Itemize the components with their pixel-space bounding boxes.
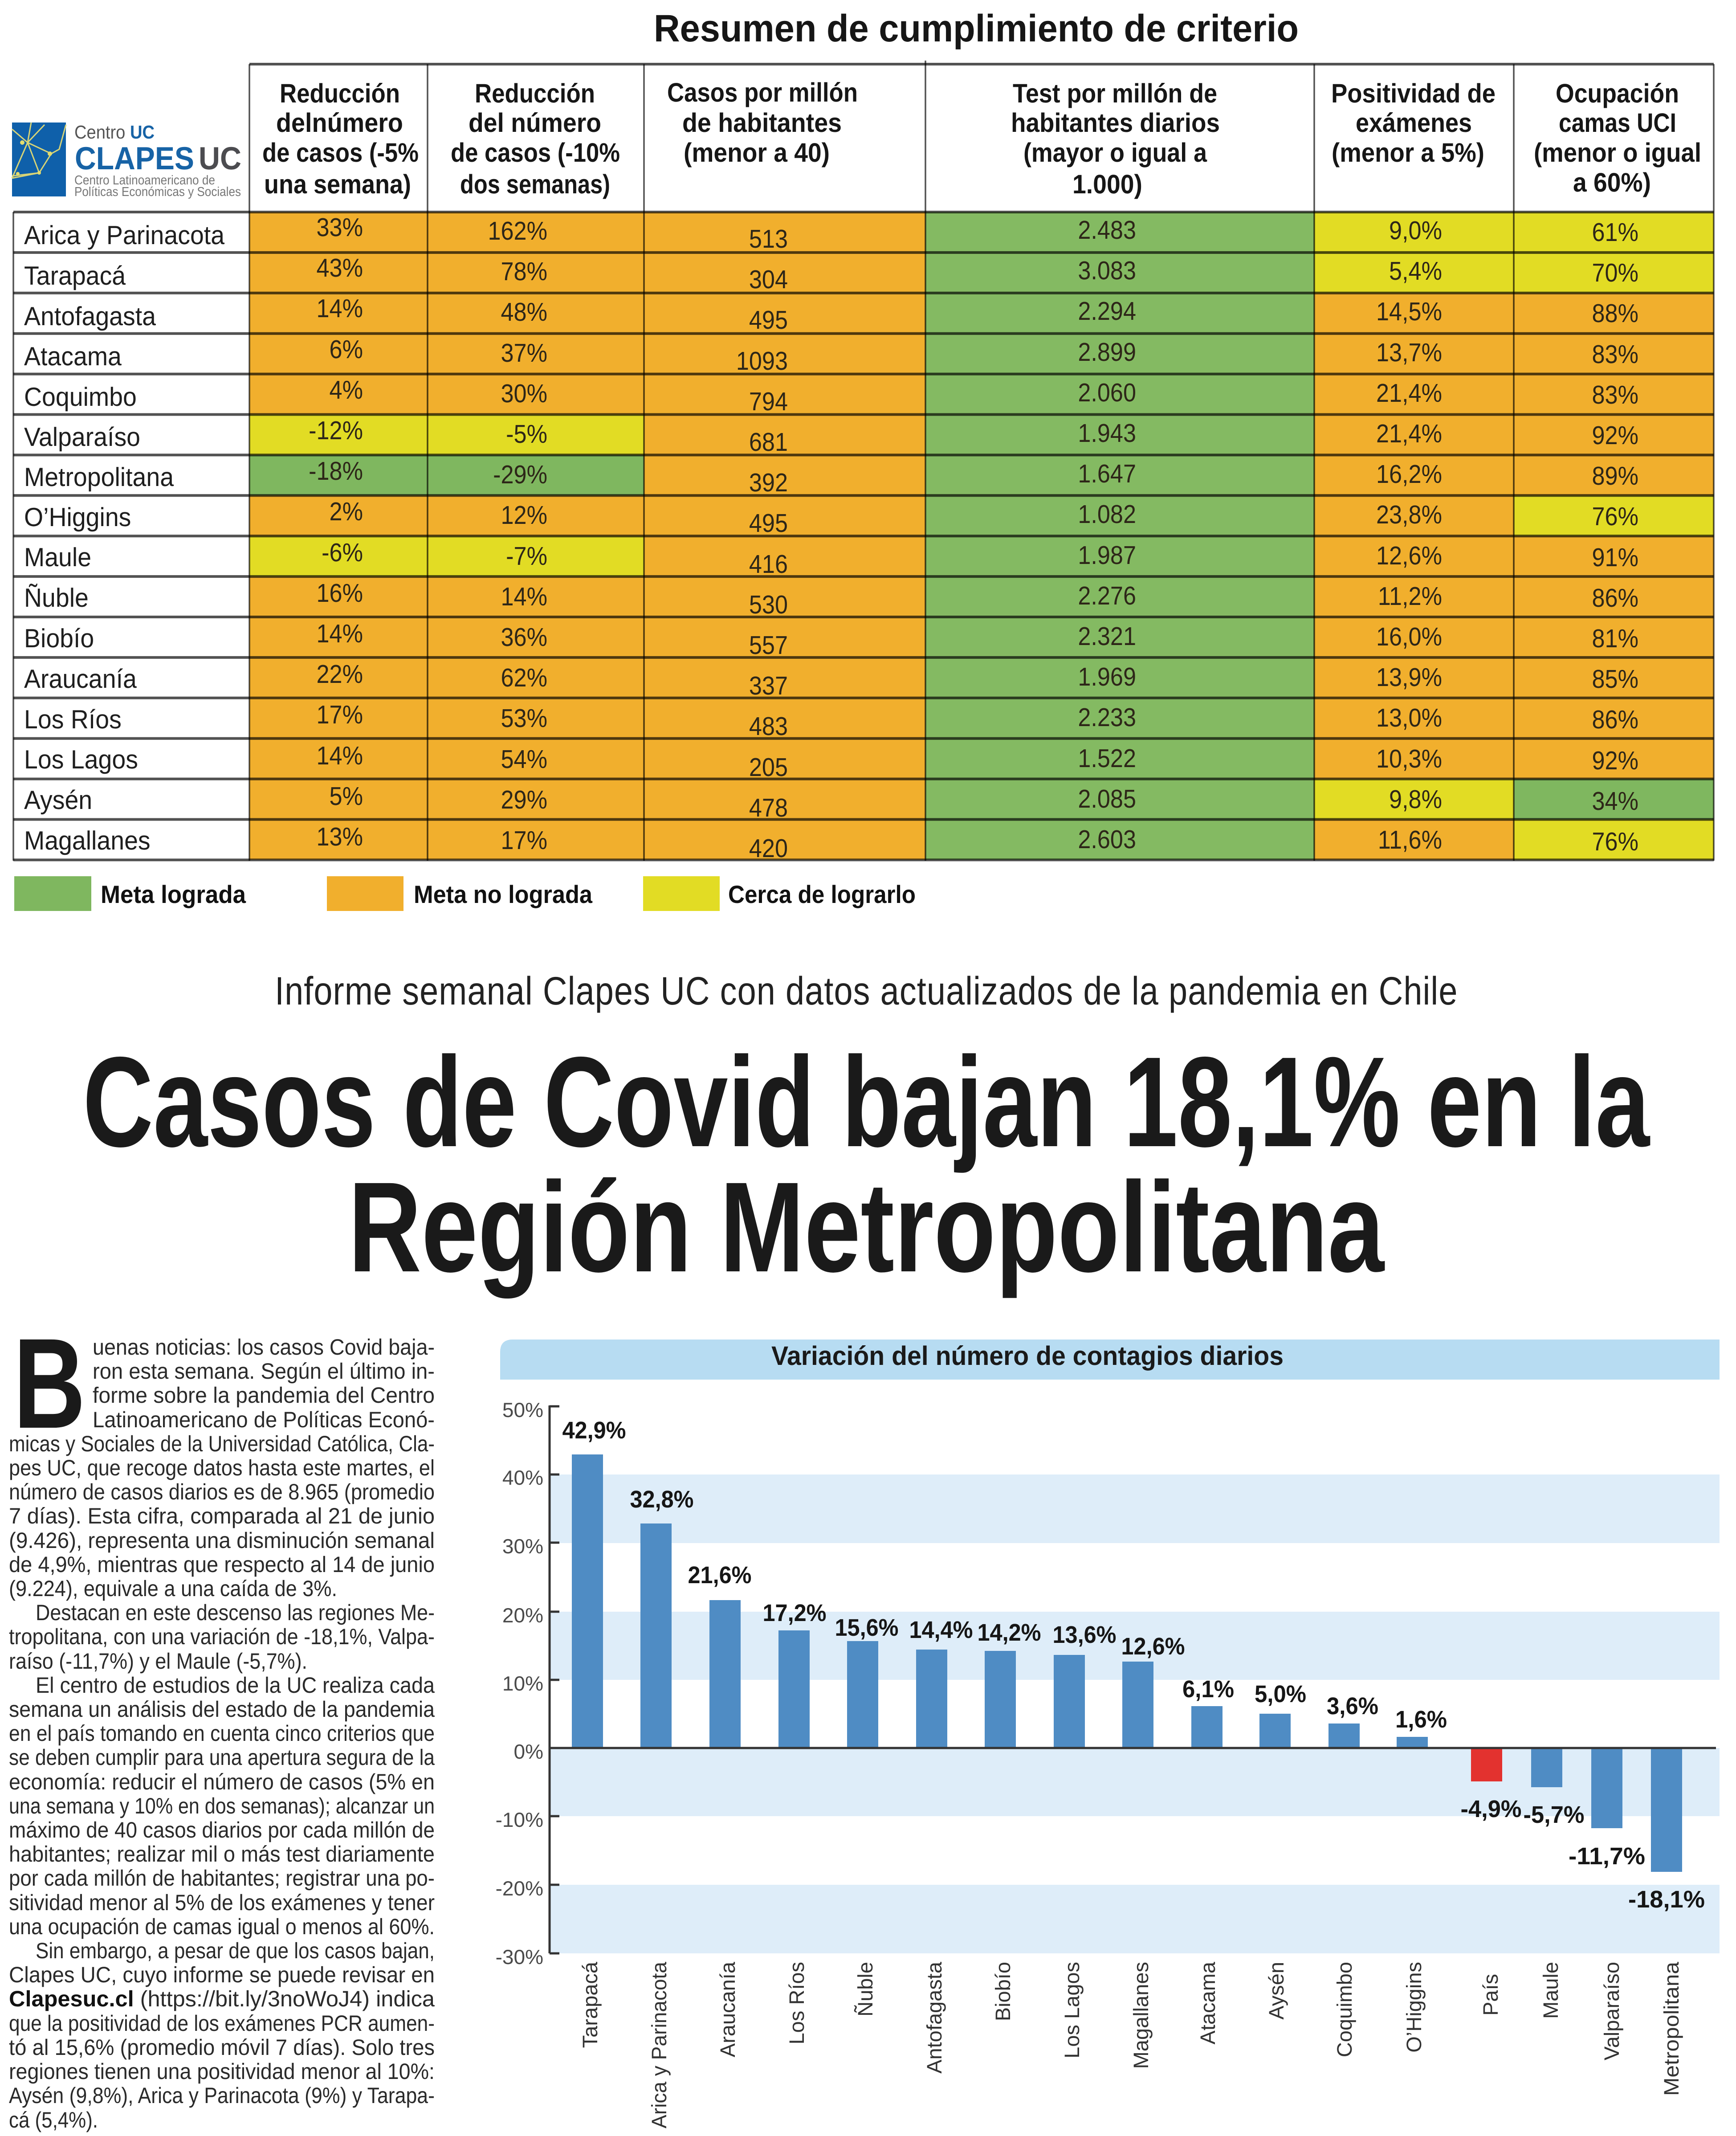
column: reducción dos semanas: 30%: [501, 379, 547, 408]
column: test por millón: 1.082: [1078, 500, 1136, 529]
column: reducción una semana: 22%: [317, 660, 363, 689]
column headers: (mayor o igual a: [1023, 138, 1207, 167]
article body text: [9, 1312, 435, 2132]
column: ocupación UCI: 88%: [1592, 299, 1638, 328]
column headers: a 60%): [1573, 167, 1651, 197]
article paragraphs: raíso (-11,7%) y el Maule (-5,7%).: [9, 1649, 307, 1674]
column headers: Ocupación: [1556, 78, 1679, 108]
column: reducción dos semanas: -7%: [506, 542, 547, 571]
legend: meta no lograda: [327, 876, 593, 911]
y axis labels: -10%: [496, 1808, 543, 1831]
region names: Antofagasta: [24, 302, 156, 331]
article paragraphs: Destacan en este descenso las regiones Me-: [36, 1600, 435, 1625]
column headers: Positividad de: [1331, 78, 1496, 108]
column headers: de habitantes: [682, 108, 842, 138]
bar value labels: 1,6%: [1395, 1706, 1447, 1733]
category labels: Metropolitana: [1659, 1961, 1683, 2096]
logo wordmark: CLAPES: [75, 141, 194, 176]
column headers: habitantes diarios: [1011, 108, 1220, 138]
column: casos por millón: 420: [749, 834, 788, 863]
column headers: Casos por millón: [667, 78, 858, 107]
article paragraphs: (9.224), equivale a una caída de 3%.: [9, 1576, 337, 1601]
category labels: Atacama: [1196, 1961, 1219, 2044]
column: ocupación UCI: 76%: [1592, 502, 1638, 531]
chart title band: Variación del número de contagios diarios: [771, 1341, 1284, 1371]
y axis labels: 40%: [502, 1466, 543, 1489]
article paragraphs: [9, 1335, 435, 2132]
column: reducción una semana: 6%: [330, 335, 363, 364]
column: ocupación UCI: 86%: [1592, 584, 1638, 613]
article paragraphs: de 4,9%, mientras que respecto al 14 de junio: [9, 1552, 435, 1577]
article paragraphs: tropolitana, con una variación de -18,1%, Valpa-: [9, 1624, 435, 1649]
region names: Ñuble: [24, 583, 89, 613]
column: reducción dos semanas: 53%: [501, 704, 547, 733]
y axis labels: [496, 1398, 543, 1969]
column: positividad: 5,4%: [1389, 257, 1442, 286]
bar value labels: 3,6%: [1327, 1693, 1378, 1719]
category labels: Aysén: [1264, 1962, 1288, 2020]
article paragraphs: forme sobre la pandemia del Centro: [93, 1383, 435, 1408]
article paragraphs: Clapesuc.cl (https://bit.ly/3noWoJ4) indica: [9, 1986, 435, 2011]
category labels: Los Ríos: [785, 1962, 808, 2044]
column: positividad: 23,8%: [1376, 500, 1442, 529]
category labels: Valparaíso: [1600, 1962, 1623, 2060]
article paragraphs: sitividad menor al 5% de los exámenes y tener: [9, 1890, 435, 1915]
category labels: Coquimbo: [1333, 1962, 1356, 2057]
bar value labels: 15,6%: [835, 1614, 899, 1641]
bar value labels: 14,4%: [909, 1617, 973, 1643]
column headers: delnúmero: [276, 108, 403, 138]
headline: [83, 1030, 1650, 1299]
article paragraphs: 7 días). Esta cifra, comparada al 21 de junio: [9, 1503, 435, 1528]
article paragraphs: que la positividad de los exámenes PCR aumen-: [9, 2011, 435, 2036]
icon: blue network square: [12, 123, 66, 196]
column: positividad: 16,0%: [1376, 622, 1442, 651]
bar value labels: 17,2%: [762, 1600, 827, 1626]
column: ocupación UCI: 83%: [1592, 380, 1638, 409]
column: casos por millón: [736, 225, 788, 863]
legend: meta no lograda: Meta no lograda: [414, 880, 593, 908]
column: positividad: 13,0%: [1376, 703, 1442, 732]
column: reducción dos semanas: 48%: [501, 298, 547, 327]
article paragraphs: micas y Sociales de la Universidad Católica, Cla-: [9, 1431, 435, 1456]
y axis labels: 10%: [502, 1672, 543, 1695]
bars: [572, 1454, 1682, 1872]
article paragraphs: una ocupación de camas igual o menos al 60%.: [9, 1914, 435, 1939]
category labels: Arica y Parinacota: [647, 1961, 671, 2128]
category labels: Araucanía: [716, 1961, 739, 2057]
headline: Región Metropolitana: [348, 1156, 1385, 1299]
column: test por millón: 2.060: [1078, 378, 1136, 407]
region names: Araucanía: [24, 664, 137, 694]
column: ocupación UCI: 76%: [1592, 827, 1638, 856]
region names: Los Ríos: [24, 705, 122, 734]
column: reducción dos semanas: [488, 216, 547, 855]
column: reducción una semana: 14%: [317, 741, 363, 770]
article paragraphs: Latinoamericano de Políticas Econó-: [93, 1407, 435, 1432]
column: casos por millón: 205: [749, 753, 788, 782]
region names: Magallanes: [24, 826, 151, 855]
logo wordmark: Políticas Económicas y Sociales: [74, 185, 241, 199]
region names: Valparaíso: [24, 422, 140, 452]
region names: Metropolitana: [24, 462, 174, 492]
column: positividad: [1376, 216, 1442, 854]
article paragraphs: economía: reducir el número de casos (5% en: [9, 1769, 435, 1794]
category labels: [578, 1961, 1683, 2128]
category labels: Tarapacá: [578, 1961, 602, 2048]
column: casos por millón: 513: [749, 225, 788, 253]
column: reducción una semana: 33%: [317, 213, 363, 242]
y axis labels: 30%: [502, 1535, 543, 1558]
column: test por millón: 1.987: [1078, 541, 1136, 570]
category labels: Los Lagos: [1060, 1962, 1084, 2058]
legend: meta lograda: Meta lograda: [101, 880, 246, 908]
column headers: (menor a 40): [684, 138, 830, 167]
column headers: del número: [469, 108, 601, 138]
table cell colours: [249, 212, 1714, 860]
column: test por millón: 3.083: [1078, 256, 1136, 285]
column: casos por millón: 392: [749, 468, 788, 497]
column: casos por millón: 304: [749, 265, 788, 294]
column headers: Reducción: [280, 78, 400, 108]
column headers: exámenes: [1356, 108, 1472, 138]
article paragraphs: ron esta semana. Según el último in-: [93, 1359, 435, 1384]
column: casos por millón: 530: [749, 590, 788, 619]
column: positividad: 21,4%: [1376, 419, 1442, 448]
article paragraphs: Clapes UC, cuyo informe se puede revisar en: [9, 1962, 435, 1987]
column: reducción una semana: -12%: [309, 416, 363, 445]
column headers: Reducción: [475, 78, 595, 108]
column headers: camas UCI: [1559, 108, 1676, 138]
bar value labels: 14,2%: [977, 1619, 1041, 1646]
y axis labels: 0%: [514, 1740, 543, 1763]
region names: O’Higgins: [24, 502, 131, 532]
column: reducción dos semanas: -29%: [493, 460, 547, 489]
chart panel: variación del número de contagios diarios: [496, 1340, 1720, 2128]
column: positividad: 12,6%: [1376, 541, 1442, 570]
y axis labels: 20%: [502, 1604, 543, 1627]
column: test por millón: 1.969: [1078, 662, 1136, 691]
column: reducción una semana: 2%: [330, 497, 363, 526]
column: ocupación UCI: 92%: [1592, 746, 1638, 775]
article paragraphs: tó al 15,6% (promedio móvil 7 días). Solo tres: [9, 2035, 435, 2060]
region names: Atacama: [24, 342, 122, 371]
article paragraphs: regiones tienen una positividad menor al 10%:: [9, 2059, 435, 2084]
column: reducción dos semanas: 78%: [501, 257, 547, 286]
column: reducción una semana: 16%: [317, 579, 363, 608]
article paragraphs: habitantes; realizar mil o más test diariamente: [9, 1842, 435, 1866]
column: reducción dos semanas: 162%: [488, 216, 547, 245]
article paragraphs: semana un análisis del estado de la pandemia: [9, 1697, 435, 1722]
column: test por millón: 2.899: [1078, 338, 1136, 367]
article paragraphs: (9.426), representa una disminución semanal: [9, 1528, 435, 1553]
column: casos por millón: 416: [749, 550, 788, 579]
article paragraphs: cá (5,4%).: [9, 2107, 98, 2132]
column: test por millón: 1.647: [1078, 459, 1136, 488]
table: cumplimiento de criterio: [13, 61, 1714, 863]
column: test por millón: 2.294: [1078, 297, 1136, 326]
article paragraphs: se deben cumplir para una apertura segura de la: [9, 1745, 435, 1770]
y axis labels: 50%: [502, 1398, 543, 1421]
column: ocupación UCI: 91%: [1592, 543, 1638, 572]
bar value labels: 42,9%: [562, 1417, 626, 1444]
column: positividad: 9,0%: [1389, 216, 1442, 245]
column: casos por millón: 681: [749, 428, 788, 457]
article paragraphs: El centro de estudios de la UC realiza cada: [36, 1673, 435, 1698]
column: reducción una semana: 4%: [330, 376, 363, 404]
column: reducción dos semanas: 54%: [501, 745, 547, 774]
column: test por millón: 2.603: [1078, 825, 1136, 854]
column headers: de casos (-5%: [262, 138, 419, 167]
drop cap B: B: [13, 1312, 86, 1455]
column: test por millón: 1.522: [1078, 744, 1136, 773]
column: test por millón: 2.321: [1078, 622, 1136, 651]
column: reducción dos semanas: 29%: [501, 785, 547, 814]
category labels: Maule: [1539, 1962, 1562, 2019]
column: reducción dos semanas: 37%: [501, 339, 547, 368]
column: ocupación UCI: 85%: [1592, 665, 1638, 694]
bar value labels: [562, 1417, 1705, 1913]
bar value labels: -4,9%: [1461, 1796, 1521, 1822]
column: reducción una semana: [309, 213, 363, 851]
column: casos por millón: 495: [749, 509, 788, 538]
article paragraphs: número de casos diarios es de 8.965 (promedio: [9, 1479, 435, 1504]
column: positividad: 13,9%: [1376, 663, 1442, 692]
bar value labels: 13,6%: [1053, 1621, 1116, 1648]
column: reducción una semana: 17%: [317, 700, 363, 729]
chart title band: [500, 1340, 1720, 1380]
column: ocupación UCI: 83%: [1592, 340, 1638, 369]
column: reducción una semana: 14%: [317, 619, 363, 648]
y axis labels: -20%: [496, 1877, 543, 1900]
column: reducción una semana: 5%: [330, 782, 363, 811]
column: positividad: 16,2%: [1376, 460, 1442, 489]
column: positividad: 9,8%: [1389, 785, 1442, 814]
article paragraphs: una semana y 10% en dos semanas); alcanzar un: [9, 1793, 435, 1818]
column: casos por millón: 794: [749, 387, 788, 416]
column: reducción una semana: -18%: [309, 457, 363, 486]
category labels: Antofagasta: [922, 1961, 946, 2074]
bar value labels: 12,6%: [1121, 1633, 1185, 1660]
logo: Clapes UC: [12, 122, 241, 199]
legend: cerca de lograrlo: Cerca de lograrlo: [728, 880, 916, 908]
column: reducción una semana: 43%: [317, 253, 363, 282]
category labels: País: [1479, 1974, 1502, 2016]
subtitle: Informe semanal Clapes UC con datos actualizados de la pandemia en Chile: [275, 968, 1457, 1013]
column: test por millón: 2.483: [1078, 216, 1136, 245]
column: casos por millón: 478: [749, 793, 788, 822]
article paragraphs: Sin embargo, a pesar de que los casos bajan,: [36, 1938, 435, 1963]
bar value labels: 6,1%: [1182, 1676, 1234, 1703]
column: test por millón: 2.085: [1078, 784, 1136, 813]
column: ocupación UCI: 81%: [1592, 624, 1638, 653]
region names: Coquimbo: [24, 382, 137, 412]
column headers: de casos (-10%: [451, 138, 620, 167]
column: ocupación UCI: 89%: [1592, 462, 1638, 490]
column: test por millón: 1.943: [1078, 419, 1136, 448]
bar: País: [1471, 1748, 1502, 1781]
article paragraphs: por cada millón de habitantes; registrar una po-: [9, 1866, 435, 1891]
column: casos por millón: 495: [749, 306, 788, 335]
column: ocupación UCI: 70%: [1592, 258, 1638, 287]
logo wordmark: UC: [199, 141, 241, 176]
region names: Tarapacá: [24, 261, 126, 290]
column: casos por millón: 557: [749, 631, 788, 660]
region names: Arica y Parinacota: [24, 221, 224, 250]
region names: Los Lagos: [24, 745, 138, 774]
category labels: O’Higgins: [1402, 1962, 1426, 2053]
bar value labels: -18,1%: [1628, 1886, 1705, 1913]
article paragraphs: uenas noticias: los casos Covid baja-: [93, 1335, 435, 1360]
column: reducción dos semanas: 14%: [501, 582, 547, 611]
y axis labels: -30%: [496, 1945, 543, 1969]
column: reducción dos semanas: 36%: [501, 623, 547, 652]
column headers: (menor a 5%): [1332, 138, 1484, 167]
category labels: Magallanes: [1129, 1962, 1153, 2069]
article paragraphs: Aysén (9,8%), Arica y Parinacota (9%) y Tarapa-: [9, 2083, 435, 2108]
logo wordmark: [74, 122, 241, 199]
article paragraphs: máximo de 40 casos diarios por cada millón de: [9, 1817, 435, 1842]
column headers: una semana): [264, 169, 411, 199]
bar value labels: -11,7%: [1569, 1843, 1645, 1870]
column headers: dos semanas): [460, 169, 610, 199]
column: casos por millón: 483: [749, 712, 788, 741]
axes: [550, 1405, 1716, 1953]
column: reducción una semana: 14%: [317, 294, 363, 323]
category labels: Ñuble: [853, 1962, 877, 2017]
column: reducción una semana: -6%: [322, 538, 363, 567]
logo wordmark: Centro Latinoamericano de: [74, 173, 215, 188]
region names: Maule: [24, 543, 91, 572]
column: positividad: 13,7%: [1376, 338, 1442, 367]
yellow and green exceptions: [249, 212, 1714, 860]
column headers: [262, 78, 1701, 199]
column headers: (menor o igual: [1534, 138, 1701, 167]
column: reducción una semana: 13%: [317, 822, 363, 851]
bar value labels: -5,7%: [1523, 1801, 1585, 1828]
region names: [24, 221, 224, 855]
column: ocupación UCI: [1592, 218, 1638, 856]
column: reducción dos semanas: -5%: [506, 420, 547, 449]
column: positividad: 11,2%: [1378, 582, 1442, 611]
column: reducción dos semanas: 17%: [501, 826, 547, 855]
column: test por millón: [1078, 216, 1136, 854]
logo wordmark: Centro UC: [74, 122, 155, 143]
region names: Aysén: [24, 785, 92, 815]
column: ocupación UCI: 34%: [1592, 787, 1638, 816]
column: positividad: 10,3%: [1376, 744, 1442, 773]
column: reducción dos semanas: 62%: [501, 663, 547, 692]
bar value labels: 5,0%: [1255, 1681, 1306, 1707]
legend: meta lograda: [14, 876, 246, 911]
chart background bands: [550, 1474, 1720, 1953]
column: ocupación UCI: 86%: [1592, 705, 1638, 734]
article paragraphs: pes UC, que recoge datos hasta este martes, el: [9, 1455, 435, 1480]
region names: Biobío: [24, 624, 94, 653]
column: casos por millón: 337: [749, 671, 788, 700]
article paragraphs: en el país tomando en cuenta cinco criterios que: [9, 1721, 435, 1746]
column: positividad: 14,5%: [1376, 297, 1442, 326]
column: casos por millón: 1093: [736, 347, 788, 376]
column: test por millón: 2.276: [1078, 581, 1136, 610]
bar value labels: 21,6%: [688, 1562, 752, 1589]
legend: [14, 876, 916, 911]
legend: cerca de lograrlo: [643, 876, 916, 911]
category labels: Biobío: [991, 1962, 1015, 2021]
column: test por millón: 2.233: [1078, 703, 1136, 732]
column: ocupación UCI: 92%: [1592, 421, 1638, 450]
table title: Resumen de cumplimiento de criterio: [654, 7, 1299, 50]
column: ocupación UCI: 61%: [1592, 218, 1638, 247]
column: reducción dos semanas: 12%: [501, 501, 547, 530]
column headers: 1.000): [1072, 169, 1142, 199]
column: positividad: 21,4%: [1376, 379, 1442, 408]
bar value labels: 32,8%: [630, 1486, 694, 1513]
column: positividad: 11,6%: [1378, 825, 1442, 854]
column headers: Test por millón de: [1013, 78, 1217, 108]
